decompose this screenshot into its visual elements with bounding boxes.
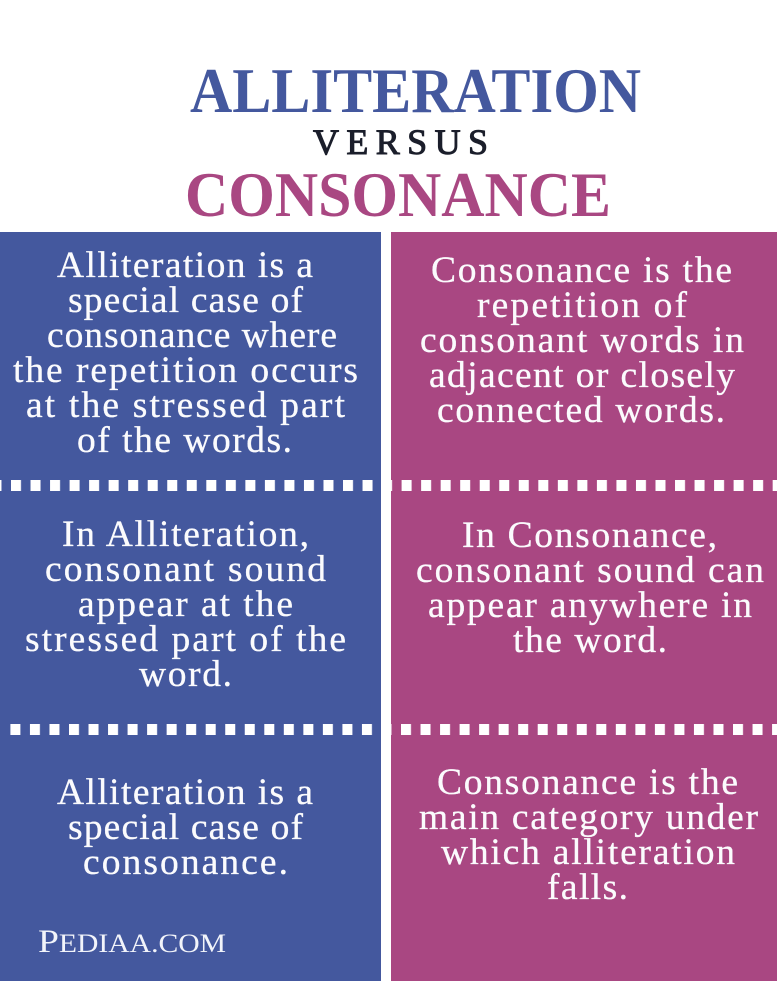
panel: consonance column [391, 232, 777, 981]
logo: Pediaa.com: PEDIAA.COM [38, 924, 226, 960]
text: alliteration sound position: consonant sound [45, 549, 326, 590]
text: consonance category: which alliteration [441, 832, 735, 873]
text: alliteration definition: Alliteration is a [57, 245, 313, 286]
text: alliteration category: consonance. [83, 842, 288, 883]
text: alliteration category: special case of [68, 807, 304, 848]
text: consonance definition: repetition of [477, 285, 688, 326]
text: alliteration definition: at the stressed part [26, 385, 346, 426]
text: alliteration definition: consonance where [47, 315, 337, 356]
text: consonance sound position: appear anywhere in [428, 585, 752, 626]
text: alliteration definition: special case of [68, 280, 304, 321]
text: alliteration definition: of the words. [77, 420, 292, 461]
text: consonance sound position: the word. [513, 620, 667, 661]
text: consonance sound position: consonant sound can [416, 550, 764, 591]
text: consonance definition: consonant words in [420, 320, 744, 361]
text: consonance sound position [416, 515, 764, 661]
text: consonance definition: Consonance is the [431, 250, 732, 291]
text: alliteration definition: the repetition occurs [13, 350, 358, 391]
divider: second dotted row [10, 724, 777, 735]
text: alliteration category: Alliteration is a [57, 772, 313, 813]
text: consonance definition: adjacent or closely [429, 355, 735, 396]
text: alliteration sound position: In Alliteration, [62, 514, 309, 555]
text: alliteration sound position: word. [139, 654, 232, 695]
text: consonance category: falls. [547, 867, 628, 908]
panel: alliteration column [0, 232, 381, 981]
text: consonance definition: connected words. [437, 390, 725, 431]
text: consonance category: main category under [419, 797, 758, 838]
text: alliteration definition [13, 245, 358, 461]
text: alliteration sound position [25, 514, 346, 695]
text: alliteration sound position: stressed part of the [25, 619, 346, 660]
text: consonance category [419, 762, 758, 908]
text: consonance category: Consonance is the [437, 762, 738, 803]
divider: first dotted row [0, 480, 777, 491]
text: alliteration sound position: appear at the [78, 584, 293, 625]
title: versus: VERSUS [313, 122, 488, 162]
title: alliteration: ALLITERATION [190, 56, 641, 126]
text: consonance definition [420, 250, 744, 431]
text: consonance sound position: In Consonance, [462, 515, 717, 556]
text: alliteration category [57, 772, 313, 883]
title: consonance: CONSONANCE [185, 160, 611, 230]
